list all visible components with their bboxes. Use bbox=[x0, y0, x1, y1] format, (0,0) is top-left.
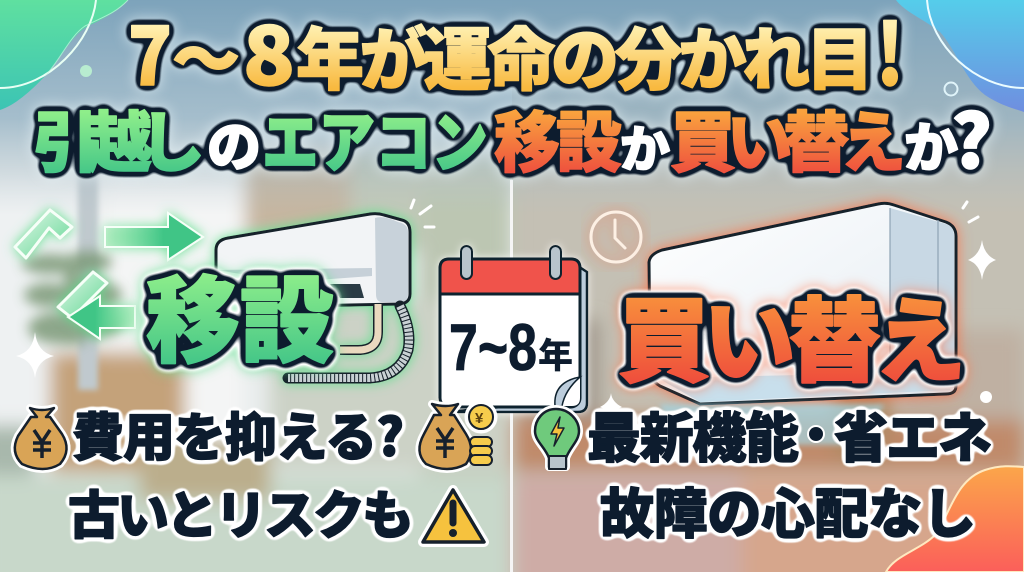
title line 2: の bbox=[207, 103, 261, 182]
window frame bbox=[78, 150, 98, 390]
title line 1: ～ bbox=[172, 5, 240, 104]
title line 2: エアコン bbox=[262, 90, 488, 186]
text: 古いとリスクも: 古いとリスクも bbox=[68, 474, 414, 549]
icon: warning triangle bbox=[423, 490, 484, 542]
title line 1 bbox=[128, 0, 904, 110]
icon: clock bbox=[591, 212, 641, 262]
blurred plant bbox=[22, 251, 122, 345]
text: 費用を抑える?: 費用を抑える? bbox=[72, 396, 404, 471]
icon: right air conditioner bbox=[649, 203, 956, 404]
icon: money bag and coins right: ¥ bbox=[475, 410, 484, 427]
icon: right sparkles bbox=[600, 202, 996, 420]
icon: left chevrons and arrows bbox=[15, 210, 203, 339]
title line 2: か bbox=[620, 110, 670, 182]
icon: left AC spark lines bbox=[411, 200, 434, 227]
icon: sparkle left bbox=[16, 332, 54, 378]
icon: left air conditioner bbox=[216, 214, 410, 378]
icon: light bulb bbox=[535, 409, 579, 469]
text: 最新機能: 最新機能 bbox=[587, 394, 799, 473]
title line 1: 年が運命の分かれ目 bbox=[296, 5, 874, 104]
heading: 買い替え: 買い替え bbox=[618, 268, 966, 401]
decorative corner blob: orange bbox=[886, 466, 1024, 572]
icon: money bag and coins right bbox=[419, 404, 494, 469]
text: 省エネ: 省エネ bbox=[834, 394, 992, 473]
text: 故障の心配なし: 故障の心配なし bbox=[600, 470, 976, 549]
icon: calendar bbox=[440, 246, 587, 412]
calendar year glyph: 年 bbox=[538, 328, 573, 379]
decorative corner blob: blue bbox=[896, 0, 1024, 112]
decorative corner blob: green bbox=[0, 0, 128, 110]
title line 2: 引越し bbox=[33, 90, 205, 186]
icon: money bag left bbox=[15, 408, 67, 469]
title line 2: 買い替え bbox=[670, 90, 906, 186]
title line 2: ? bbox=[951, 83, 992, 190]
title line 2 bbox=[33, 83, 992, 190]
text: separator dot bbox=[809, 427, 823, 441]
calendar label: 7~8 bbox=[449, 310, 537, 384]
cold air stream bbox=[660, 404, 885, 445]
heading: 移設: 移設 bbox=[146, 246, 334, 382]
title line 2: か bbox=[904, 104, 958, 183]
title line 2: 移設 bbox=[494, 90, 622, 186]
